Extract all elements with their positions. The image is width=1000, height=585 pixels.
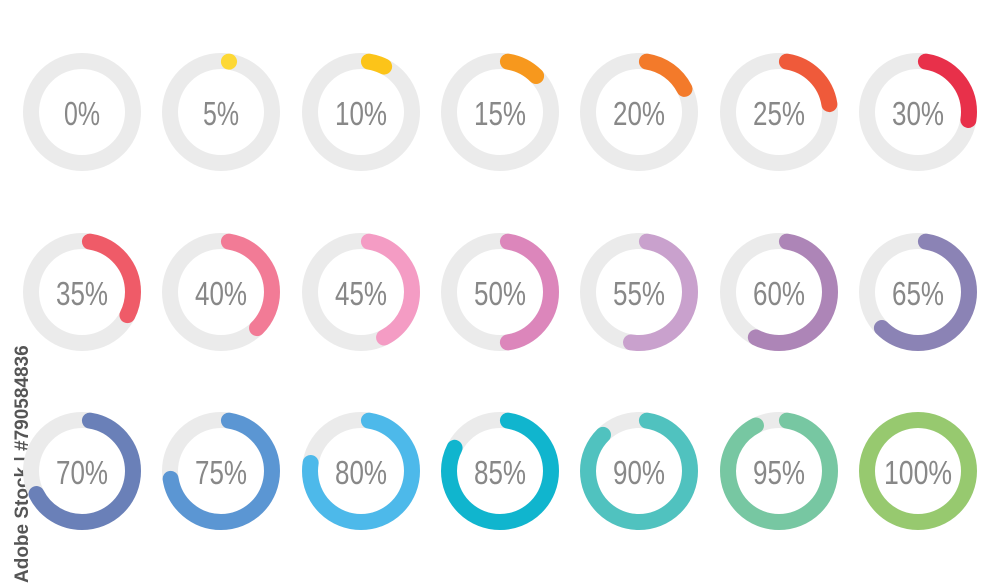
donut 5%: 5% (203, 95, 239, 132)
donut 80% (310, 420, 412, 522)
donut 35%: 35% (56, 275, 108, 312)
donut 85%: 85% (474, 454, 526, 491)
donut 65% (867, 241, 969, 343)
donut 60%: 60% (753, 275, 805, 312)
donut 95%: 95% (753, 454, 805, 491)
donut 45%: 45% (335, 275, 387, 312)
donut 50% (449, 241, 551, 343)
donut 25%: 25% (753, 95, 805, 132)
donut 80%: 80% (335, 454, 387, 491)
donut grid: 0% (64, 95, 100, 132)
donut 75% (170, 420, 272, 522)
donut 20%: 20% (613, 95, 665, 132)
donut 100% (867, 420, 969, 522)
donut 15%: 15% (474, 95, 526, 132)
donut 15% (449, 61, 551, 163)
donut 45% (310, 241, 412, 343)
donut 30% (867, 61, 969, 163)
donut 5% (170, 61, 272, 163)
donut 70% (31, 420, 133, 522)
donut 20% (588, 61, 690, 163)
donut 90% (588, 420, 690, 522)
donut 40%: 40% (195, 275, 247, 312)
donut 60% (728, 241, 830, 343)
donut 25% (728, 61, 830, 163)
donut 85% (449, 420, 551, 522)
donut 55% (588, 241, 690, 343)
donut 35% (31, 241, 133, 343)
donut 90%: 90% (613, 454, 665, 491)
donut 100%: 100% (884, 454, 952, 491)
donut 40% (170, 241, 272, 343)
donut grid (31, 61, 969, 522)
watermark: vertical stock id: Adobe Stock | #790584836 (12, 345, 33, 583)
donut 65%: 65% (892, 275, 944, 312)
donut 70%: 70% (56, 454, 108, 491)
donut 75%: 75% (195, 454, 247, 491)
donut 95% (728, 420, 830, 522)
donut 10% (310, 61, 412, 163)
donut 30%: 30% (892, 95, 944, 132)
donut 10%: 10% (335, 95, 387, 132)
donut 50%: 50% (474, 275, 526, 312)
donut 55%: 55% (613, 275, 665, 312)
